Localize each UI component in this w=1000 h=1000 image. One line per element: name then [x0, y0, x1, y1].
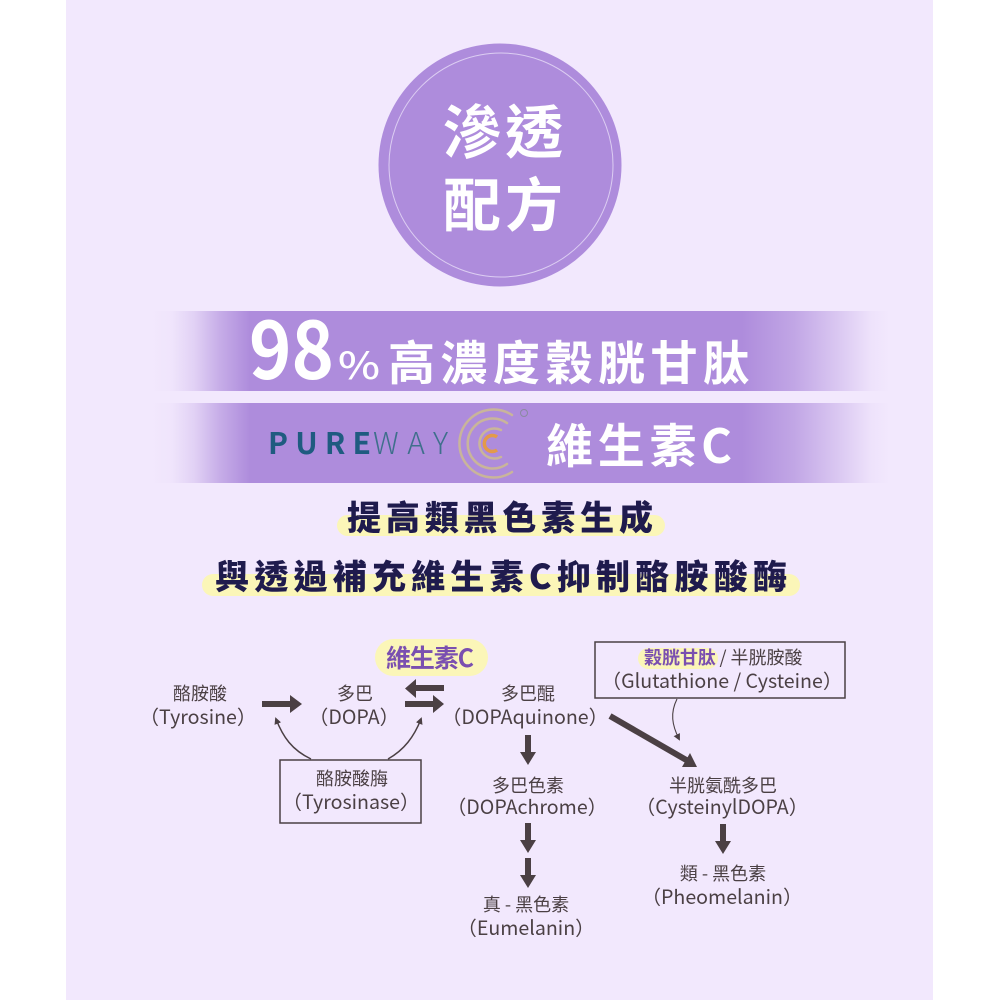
node: DOPA: （DOPA）	[309, 701, 399, 730]
banner: 98% glutathione: 98	[249, 287, 334, 402]
node: cysteinylDOPA: 半胱氨酰多巴	[669, 772, 777, 798]
arrow: DOPAchrome to eumelanin 2	[520, 858, 536, 888]
node: eumelanin	[457, 891, 595, 941]
banner: PureWay vitamin C: 維生素C	[546, 408, 732, 477]
node: DOPAchrome: （DOPAchrome）	[447, 791, 607, 820]
node: eumelanin: 真 - 黑色素	[483, 891, 569, 917]
arrow head: diagonal	[682, 753, 697, 767]
box: glutathione / cysteine	[595, 642, 845, 698]
box: tyrosinase: 酪胺酸脢	[316, 765, 388, 791]
curved arrow: glutathione to cysteinylDOPA step	[673, 699, 679, 739]
node: DOPA	[309, 680, 399, 730]
arrow: cysteinylDOPA to pheomelanin	[715, 824, 731, 854]
node: tyrosine: 酪胺酸	[173, 680, 227, 706]
title badge	[378, 44, 622, 286]
arrow: DOPAquinone to DOPA	[405, 679, 444, 698]
box: glutathione / cysteine: 穀胱甘肽	[644, 644, 716, 670]
pathway diagram	[139, 639, 845, 941]
node: tyrosine: （Tyrosine）	[139, 701, 257, 730]
banner: 98% glutathione: %	[338, 336, 380, 390]
node: tyrosine	[139, 680, 257, 730]
banner: PureWay vitamin C	[150, 403, 890, 483]
arrow: DOPA to DOPAquinone	[405, 695, 444, 713]
box: glutathione / cysteine: / 半胱胺酸	[719, 644, 803, 670]
node: pheomelanin: （Pheomelanin）	[641, 881, 803, 910]
node: cysteinylDOPA: （CysteinylDOPA）	[636, 791, 808, 820]
curved arrow: tyrosinase to tyrosine step	[276, 719, 311, 759]
curved arrow: tyrosinase to DOPA step	[388, 719, 421, 759]
title badge: 滲透	[443, 86, 563, 170]
banner: 98% glutathione: 高濃度穀胱甘肽	[388, 325, 750, 394]
headline line 2: 與透過補充維生素C抑制酪胺酸酶	[215, 550, 787, 599]
node: DOPA: 多巴	[337, 680, 373, 706]
node: DOPAquinone	[442, 680, 608, 730]
PureWay logo	[268, 410, 528, 478]
node: DOPAchrome: 多巴色素	[492, 772, 564, 798]
PureWay logo: WAY	[373, 419, 448, 463]
title badge: 配方	[443, 159, 563, 243]
node: DOPAquinone: （DOPAquinone）	[442, 701, 608, 730]
arrow: DOPAquinone to cysteinylDOPA	[610, 716, 688, 761]
headline line 1: 提高類黑色素生成	[347, 491, 653, 540]
box: tyrosinase: （Tyrosinase）	[282, 786, 420, 815]
node: pheomelanin	[641, 860, 803, 910]
vitamin C tag: 維生素C	[386, 639, 474, 675]
box: glutathione / cysteine: （Glutathione / Cysteine）	[602, 665, 842, 694]
node: DOPAchrome	[447, 772, 607, 820]
node: cysteinylDOPA	[636, 772, 808, 820]
PureWay logo: PURE	[268, 419, 371, 463]
node: eumelanin: （Eumelanin）	[457, 912, 595, 941]
banner: 98% glutathione	[150, 287, 890, 402]
arrow: DOPAquinone to DOPAchrome	[520, 735, 536, 765]
arrow: tyrosine to DOPA	[262, 695, 302, 713]
arrow: DOPAchrome to eumelanin 1	[520, 823, 536, 853]
box: tyrosinase	[280, 760, 421, 823]
node: DOPAquinone: 多巴醌	[501, 680, 555, 706]
node: pheomelanin: 類 - 黑色素	[680, 860, 766, 886]
